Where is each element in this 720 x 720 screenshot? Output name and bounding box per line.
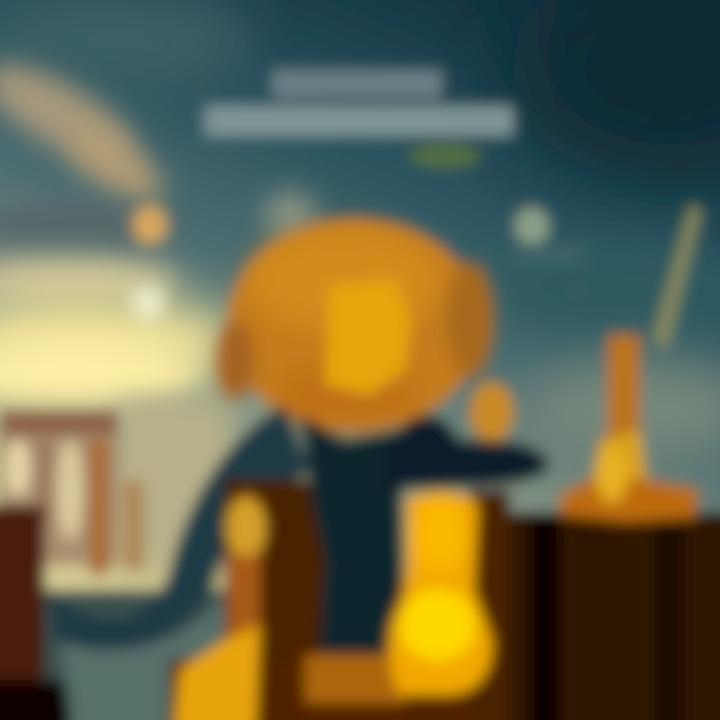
highlighted subtitle bbox=[409, 145, 481, 167]
dark central figure bbox=[300, 415, 405, 655]
left golden pillar bbox=[172, 496, 266, 720]
bottom gold slab bbox=[305, 655, 405, 703]
dark shoulder going right bbox=[385, 415, 550, 490]
brown central floor bbox=[170, 480, 570, 720]
right dark brown block bbox=[470, 490, 720, 720]
title block (illegible in reference) bbox=[205, 70, 513, 136]
grey-blue ground under the curve bbox=[45, 590, 225, 720]
rising arrow shaft bbox=[652, 205, 702, 350]
coin symbol bbox=[325, 280, 412, 395]
small label bbox=[515, 246, 585, 262]
right coin edge highlight bbox=[470, 382, 514, 442]
bottom left dark corner bbox=[0, 680, 70, 720]
left ruined columns bbox=[0, 410, 144, 575]
dark teal curved arm bbox=[50, 405, 310, 650]
clouds and glowing horizon bbox=[0, 47, 316, 570]
small coin icon bbox=[515, 207, 549, 245]
right golden chess piece bbox=[560, 335, 700, 522]
grey-green ribbon foot bbox=[60, 595, 225, 720]
left brown foreground bbox=[0, 505, 45, 720]
bright yellow pillar bbox=[389, 492, 492, 695]
large gold coin bbox=[215, 219, 494, 431]
